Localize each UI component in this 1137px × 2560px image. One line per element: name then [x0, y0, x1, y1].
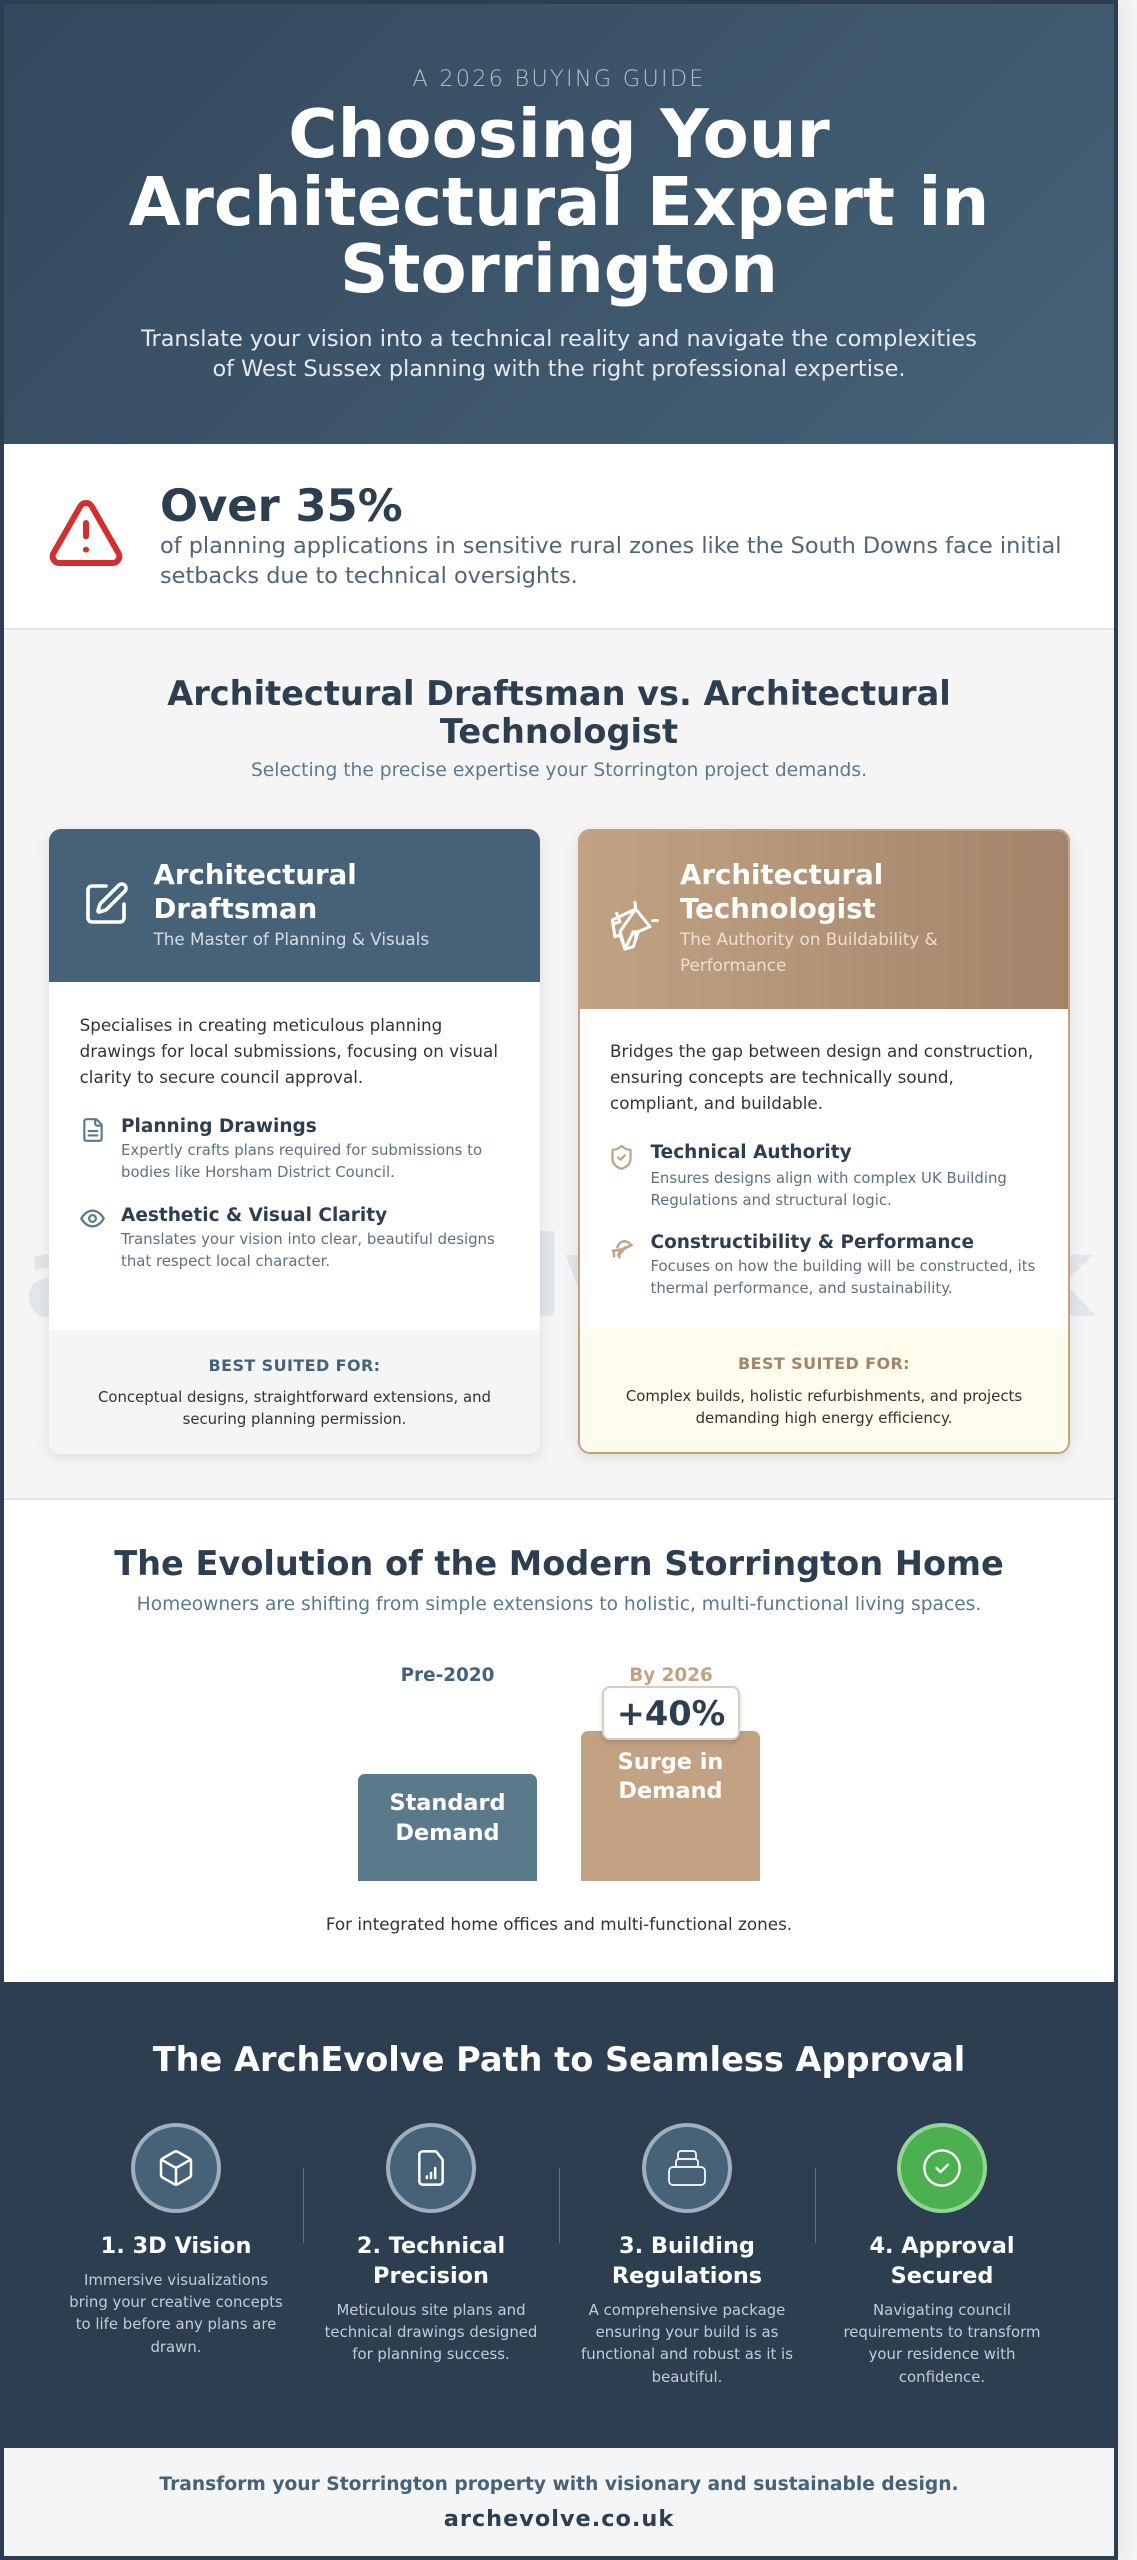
step text	[69, 2271, 283, 2356]
best suited label: BEST SUITED FOR:	[738, 1354, 910, 1373]
icon: check circle	[897, 2123, 987, 2213]
step text: bring your creative concepts	[69, 2293, 283, 2311]
card intro: Bridges the gap between design and construction,	[610, 1041, 1033, 1061]
icon: cube	[131, 2123, 221, 2213]
bar text	[618, 1748, 723, 1804]
card: architectural draftsman	[49, 829, 540, 1454]
bar text: Demand	[618, 1778, 723, 1804]
icon: drafting compass	[610, 900, 659, 951]
feature text: technical authority	[650, 1168, 1007, 1209]
title: Architectural Expert in	[129, 162, 989, 240]
watermark text: archevolve.co.uk	[24, 1213, 1094, 1343]
step 1	[69, 2123, 283, 2356]
comparison heading: Architectural Draftsman vs. Architectural	[167, 674, 951, 713]
bar text: Surge in	[618, 1748, 723, 1774]
evolution subheading: Homeowners are shifting from simple extensions to holistic, multi-functional living spaces.	[137, 1594, 981, 1615]
icon: hard hat	[611, 1240, 633, 1259]
comparison heading: Technologist	[440, 712, 678, 750]
step text	[325, 2301, 537, 2363]
step text: beautiful.	[652, 2368, 722, 2386]
subtitle	[141, 326, 977, 382]
card title: Draftsman	[154, 892, 317, 925]
panel: warning stat	[4, 444, 1114, 630]
comparison subheading: Selecting the precise expertise your Storrington project demands.	[251, 760, 867, 781]
card tagline: The Authority on Buildability &	[680, 929, 938, 949]
eyebrow: A 2026 BUYING GUIDE	[412, 66, 706, 92]
icon: document	[83, 1118, 103, 1142]
step text: ensuring your build is as	[596, 2323, 778, 2341]
step title: 3. Building	[619, 2233, 755, 2259]
card title	[680, 858, 883, 925]
card intro: compliant, and buildable.	[610, 1093, 823, 1113]
feature text: planning drawings	[121, 1141, 482, 1181]
card header	[580, 831, 1068, 1009]
card: architectural technologist	[578, 829, 1070, 1454]
icon: stacked layers	[642, 2123, 732, 2213]
step text: Immersive visualizations	[84, 2271, 268, 2289]
card intro: ensuring concepts are technically sound,	[610, 1067, 954, 1087]
card intro: drawings for local submissions, focusing on visual	[80, 1040, 498, 1060]
card header	[49, 829, 540, 982]
card intro	[610, 1041, 1033, 1113]
best suited text: demanding high energy efficiency.	[696, 1409, 952, 1427]
best suited text: Conceptual designs, straightforward extensions, and	[98, 1388, 491, 1406]
subtitle: Translate your vision into a technical reality and navigate the complexities	[141, 326, 977, 352]
best suited text	[626, 1387, 1022, 1427]
card tagline	[680, 929, 938, 975]
panel: approval path	[0, 1982, 1118, 2448]
step 4	[843, 2123, 1041, 2386]
step title: Precision	[373, 2263, 489, 2289]
stat description: setbacks due to technical oversights.	[160, 563, 578, 589]
comparison heading	[167, 674, 951, 750]
card intro	[80, 1014, 498, 1086]
feature title: technical authority: Technical Authority	[650, 1142, 852, 1163]
step text: for planning success.	[352, 2345, 510, 2363]
panel: comparison	[4, 630, 1114, 1500]
panel: evolution	[4, 1500, 1114, 1982]
feature text: aesthetic clarity: Translates your vision into clear, beautiful designs	[121, 1230, 495, 1248]
stat description	[160, 533, 1062, 589]
title	[129, 95, 989, 308]
icon: eye	[80, 1210, 105, 1228]
step text: drawn.	[150, 2338, 202, 2356]
card intro: Specialises in creating meticulous planning	[80, 1014, 442, 1034]
step title	[869, 2233, 1015, 2289]
step text	[581, 2301, 793, 2386]
step divider	[303, 2168, 304, 2243]
feature title: aesthetic clarity: Aesthetic & Visual Clarity	[121, 1205, 387, 1226]
panel: footer	[4, 2448, 1114, 2556]
feature text: planning drawings: Expertly crafts plans required for submissions to	[121, 1141, 482, 1159]
best suited label: BEST SUITED FOR:	[209, 1356, 380, 1375]
card title: Architectural	[680, 858, 883, 891]
subtitle: of West Sussex planning with the right professional expertise.	[212, 356, 906, 382]
footer url: archevolve.co.uk	[444, 2506, 674, 2532]
card tagline: Performance	[680, 955, 786, 975]
card intro: clarity to secure council approval.	[80, 1066, 363, 1086]
best suited text: securing planning permission.	[183, 1410, 406, 1428]
step divider	[815, 2168, 816, 2243]
bar chart: demand	[358, 1665, 760, 1881]
step 3	[581, 2123, 793, 2386]
step text: requirements to transform	[843, 2323, 1041, 2341]
step text	[843, 2301, 1041, 2386]
bar label: by 2026: By 2026	[629, 1665, 713, 1686]
step title	[357, 2233, 505, 2289]
chart caption: For integrated home offices and multi-functional zones.	[326, 1914, 792, 1934]
bar label: pre-2020: Pre-2020	[401, 1665, 494, 1686]
step text: your residence with	[869, 2345, 1015, 2363]
icon: warning triangle	[50, 500, 122, 566]
card tagline: The Master of Planning & Visuals	[154, 928, 429, 948]
evolution heading: The Evolution of the Modern Storrington Home	[114, 1544, 1004, 1583]
footer tagline: Transform your Storrington property with visionary and sustainable design.	[159, 2474, 959, 2494]
step divider	[559, 2168, 560, 2243]
step title	[612, 2233, 762, 2289]
step title: Secured	[891, 2263, 993, 2289]
title: Storrington	[340, 230, 778, 308]
card title: Architectural	[154, 858, 357, 891]
step text: functional and robust as it is	[581, 2345, 793, 2363]
card title	[154, 858, 357, 925]
feature text: constructibility: thermal performance, and sustainability.	[650, 1279, 953, 1297]
frame edge	[0, 1982, 4, 2448]
feature text: aesthetic clarity	[120, 1230, 495, 1270]
step title: Regulations	[612, 2263, 762, 2289]
best suited text	[98, 1388, 491, 1428]
step text: Meticulous site plans and	[336, 2301, 526, 2319]
feature text: planning drawings: bodies like Horsham District Council.	[121, 1163, 395, 1181]
feature title: planning drawings: Planning Drawings	[121, 1116, 317, 1137]
bar text: Demand	[395, 1820, 500, 1846]
bar text: Standard	[389, 1790, 506, 1816]
title: Choosing Your	[288, 95, 830, 173]
card title: Technologist	[680, 892, 876, 925]
step text: A comprehensive package	[589, 2301, 785, 2319]
panel: header	[0, 0, 1118, 444]
step title: 4. Approval	[869, 2233, 1015, 2259]
icon: file chart	[386, 2123, 476, 2213]
step 2	[325, 2123, 537, 2363]
callout: +40%	[602, 1686, 740, 1740]
stat figure: Over 35%	[160, 479, 403, 532]
bar: surge in demand	[581, 1731, 760, 1881]
feature text: constructibility: Focuses on how the building will be constructed, its	[650, 1256, 1035, 1274]
path heading: The ArchEvolve Path to Seamless Approval	[153, 2040, 965, 2079]
bar: standard demand	[358, 1774, 537, 1881]
feature text: technical authority: Ensures designs align with complex UK Building	[650, 1168, 1007, 1186]
step text: Navigating council	[873, 2301, 1011, 2319]
step text: technical drawings designed	[325, 2323, 537, 2341]
feature title: constructibility: Constructibility & Performance	[650, 1232, 974, 1253]
callout value: +40%	[617, 1694, 725, 1732]
feature text: technical authority: Regulations and structural logic.	[650, 1191, 892, 1209]
feature text: constructibility	[650, 1256, 1035, 1297]
step text: to life before any plans are	[76, 2315, 276, 2333]
stat description: of planning applications in sensitive rural zones like the South Downs face initial	[160, 533, 1062, 559]
best suited text: Complex builds, holistic refurbishments, and projects	[626, 1387, 1022, 1405]
step title: 1. 3D Vision	[101, 2233, 251, 2259]
step text: confidence.	[899, 2368, 985, 2386]
icon: shield check	[611, 1145, 632, 1170]
step title: 2. Technical	[357, 2233, 505, 2259]
best suited panel	[580, 1330, 1068, 1452]
bar text	[389, 1790, 506, 1846]
best suited panel	[49, 1330, 540, 1454]
icon: pencil square	[86, 882, 128, 924]
feature text: aesthetic clarity: that respect local character.	[121, 1252, 330, 1270]
